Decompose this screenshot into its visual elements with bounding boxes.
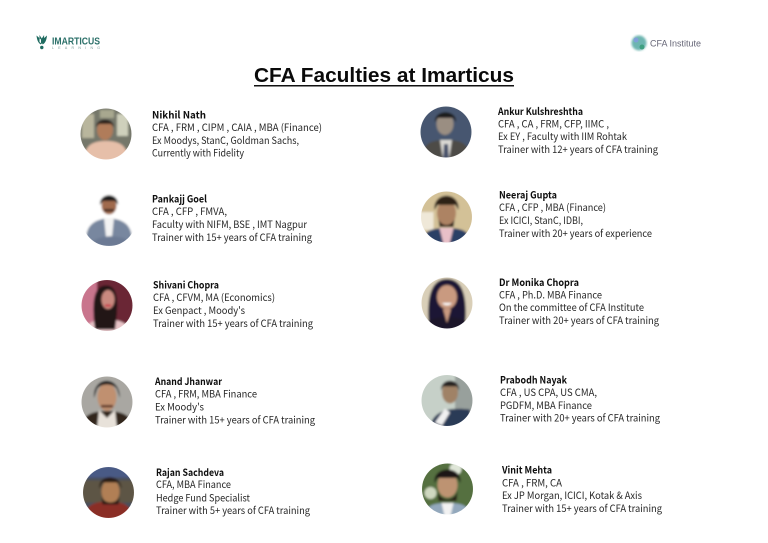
credentials: CFA , CA , FRM, CFP, IIMC , bbox=[498, 116, 609, 130]
photo: Rajan Sachdeva bbox=[83, 467, 134, 518]
logo: CFA Institute: CFA Institute bbox=[650, 38, 701, 48]
name: Ankur Kulshreshtha bbox=[497, 103, 583, 118]
credentials: CFA , US CPA, US CMA, bbox=[500, 384, 597, 399]
credentials: CFA , CFVM, MA (Economics) bbox=[153, 289, 275, 304]
faculty: Rajan Sachdeva bbox=[82, 464, 310, 520]
logo: Imarticus Learning bbox=[36, 35, 100, 50]
faculty: Shivani Chopra bbox=[80, 276, 313, 332]
name: Neeraj Gupta bbox=[499, 186, 557, 202]
experience: Hedge Fund Specialist bbox=[156, 490, 250, 504]
name: Vinit Mehta bbox=[501, 462, 552, 476]
photo: Prabodh Nayak bbox=[422, 375, 472, 426]
experience: Ex Moody's bbox=[155, 398, 204, 414]
faculty: Vinit Mehta bbox=[420, 462, 662, 516]
faculty: Prabodh Nayak bbox=[420, 372, 660, 428]
training: Trainer with 5+ years of CFA training bbox=[156, 502, 310, 517]
faculty: Neeraj Gupta bbox=[421, 190, 652, 242]
experience: Faculty with NIFM, BSE , IMT Nagpur bbox=[152, 216, 307, 231]
credentials: CFA, MBA Finance bbox=[156, 476, 231, 491]
faculty: Ankur Kulshreshtha bbox=[419, 103, 658, 159]
photo: Vinit Mehta bbox=[422, 464, 473, 514]
current role: Currently with Fidelity bbox=[152, 144, 245, 160]
experience: Ex ICICI, StanC, IDBI, bbox=[499, 212, 583, 227]
faculty: Nikhil Nath bbox=[79, 106, 322, 161]
name: Nikhil Nath bbox=[152, 106, 206, 122]
name: Pankajj Goel bbox=[152, 190, 207, 206]
faculty: Dr Monika Chopra bbox=[420, 274, 659, 330]
photo: Dr Monika Chopra bbox=[422, 278, 472, 328]
photo: Anand Jhanwar bbox=[82, 376, 132, 428]
logo: CFA Institute bbox=[632, 36, 701, 50]
faculty: Anand Jhanwar bbox=[80, 373, 315, 429]
experience: Ex Moodys, StanC, Goldman Sachs, bbox=[152, 132, 299, 147]
photo: Pankajj Goel bbox=[86, 194, 132, 246]
logo: Imarticus Learning: IMARTICUS bbox=[52, 36, 100, 48]
credentials: CFA , CFP , FMVA, bbox=[152, 203, 227, 218]
training: Trainer with 20+ years of CFA training bbox=[499, 312, 659, 327]
training: Trainer with 15+ years of CFA training bbox=[152, 229, 312, 244]
photo: Ankur Kulshreshtha bbox=[420, 106, 472, 158]
experience: Ex JP Morgan, ICICI, Kotak & Axis bbox=[502, 487, 642, 502]
experience: Ex EY , Faculty with IIM Rohtak bbox=[498, 128, 627, 143]
photo: Nikhil Nath bbox=[80, 108, 132, 160]
credentials: CFA , Ph.D. MBA Finance bbox=[499, 286, 602, 302]
experience: PGDFM, MBA Finance bbox=[500, 397, 592, 412]
experience: Ex Genpact , Moody's bbox=[153, 302, 245, 317]
photo: Shivani Chopra bbox=[82, 280, 132, 331]
faculty: Pankajj Goel bbox=[81, 190, 312, 247]
photo: Neeraj Gupta bbox=[421, 192, 472, 242]
name: Prabodh Nayak bbox=[500, 372, 567, 386]
training: Trainer with 20+ years of CFA training bbox=[500, 410, 660, 424]
training: Trainer with 20+ years of experience bbox=[499, 225, 652, 240]
training: Trainer with 15+ years of CFA training bbox=[155, 412, 315, 426]
training: Trainer with 15+ years of CFA training bbox=[502, 500, 662, 515]
credentials: CFA , CFP , MBA (Finance) bbox=[499, 199, 606, 214]
credentials: CFA , FRM, MBA Finance bbox=[155, 386, 257, 400]
name: Anand Jhanwar bbox=[154, 373, 223, 388]
credentials: CFA , FRM, CA bbox=[502, 474, 563, 490]
name: Shivani Chopra bbox=[153, 276, 219, 292]
training: Trainer with 15+ years of CFA training bbox=[153, 315, 313, 330]
name: Rajan Sachdeva bbox=[156, 464, 224, 479]
credentials: CFA , FRM , CIPM , CAIA , MBA (Finance) bbox=[152, 119, 322, 134]
experience: On the committee of CFA Institute bbox=[499, 299, 644, 314]
logo: Imarticus Learning: LEARNING bbox=[52, 46, 100, 50]
name: Dr Monika Chopra bbox=[499, 274, 579, 289]
title: CFA Faculties at Imarticus bbox=[254, 64, 514, 87]
training: Trainer with 12+ years of CFA training bbox=[498, 141, 658, 156]
